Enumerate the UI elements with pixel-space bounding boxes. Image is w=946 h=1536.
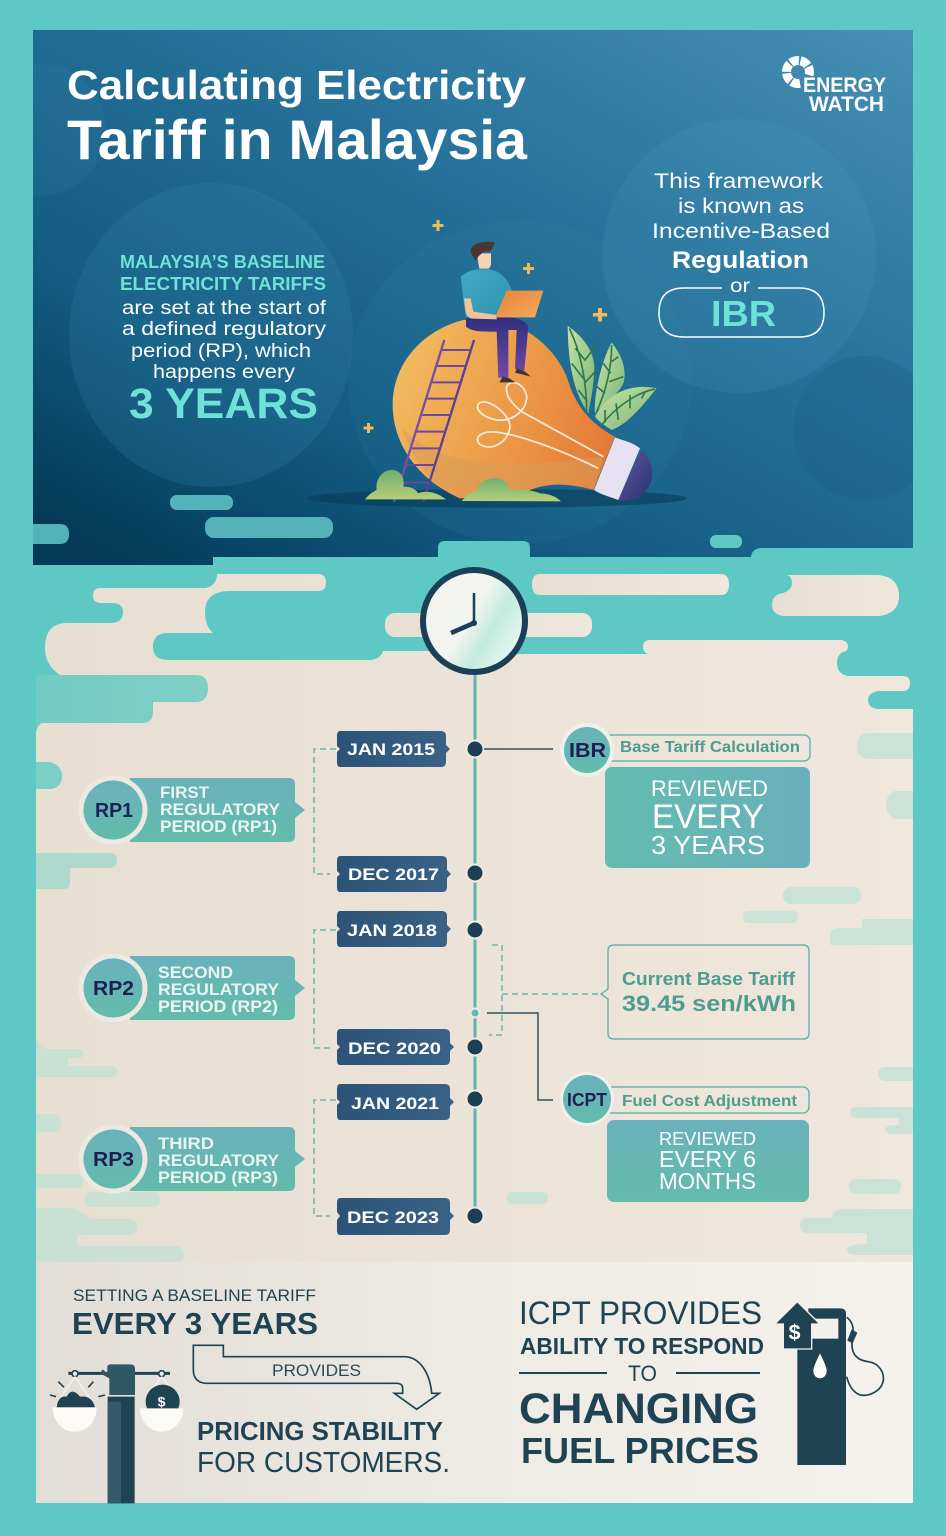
panel: ICPT fuel cost adjustment: REVIEWED — [659, 1129, 756, 1149]
text block: IBR framework: This framework — [654, 170, 824, 193]
panel: ICPT fuel cost adjustment: ICPT — [567, 1090, 607, 1110]
date label: Dec 2023: DEC 2023 — [347, 1208, 439, 1227]
text block: pricing stability: PRICING STABILITY — [197, 1416, 443, 1446]
panel: ICPT fuel cost adjustment: MONTHS — [659, 1168, 756, 1194]
badge: RP1 first regulatory period — [78, 776, 305, 844]
date label: Jan 2015 — [337, 731, 450, 767]
text block: every 3 years: EVERY 3 YEARS — [72, 1306, 318, 1341]
text block: baseline tariffs: period (RP), which — [131, 341, 311, 362]
badge: RP1 first regulatory period: REGULATORY — [160, 800, 281, 819]
badge: RP3 third regulatory period: REGULATORY — [158, 1151, 280, 1170]
connector: timeline to IBR — [484, 748, 553, 750]
badge: RP3 third regulatory period — [78, 1124, 305, 1194]
text block: IBR framework: Incentive-Based — [652, 220, 830, 243]
text block: every 3 years: SETTING A BASELINE TARIFF — [73, 1286, 316, 1305]
text block: pricing stability: FOR CUSTOMERS. — [197, 1447, 450, 1479]
date label: Dec 2017: DEC 2017 — [348, 865, 439, 884]
text block: baseline tariffs: happens every — [153, 362, 296, 383]
panel: IBR base tariff calculation: EVERY — [652, 798, 764, 836]
illustration: man on light bulb — [307, 242, 687, 508]
date label: Dec 2023 — [337, 1198, 454, 1235]
title — [67, 62, 528, 171]
text block: ICPT provides: TO — [628, 1361, 657, 1386]
text block: ICPT provides: CHANGING — [519, 1385, 758, 1433]
date label: Jan 2018 — [337, 911, 451, 947]
text block: pricing stability — [197, 1416, 450, 1479]
text block: IBR framework: or — [730, 276, 751, 297]
text block: baseline tariffs: MALAYSIA’S BASELINE — [120, 252, 325, 272]
panel: timeline paper with clouds — [36, 574, 913, 1262]
text block: every 3 years — [72, 1286, 318, 1341]
text block: baseline tariffs — [120, 252, 327, 428]
logo: Energy Watch — [785, 59, 886, 116]
panel: IBR base tariff calculation: REVIEWED — [651, 776, 768, 801]
text block: baseline tariffs: ELECTRICITY TARIFFS — [120, 274, 326, 294]
text block: IBR framework: IBR — [711, 293, 776, 334]
badge: RP1 first regulatory period: FIRST — [160, 783, 210, 802]
sparkles — [364, 220, 607, 433]
text block: ICPT provides: FUEL PRICES — [521, 1430, 759, 1471]
badge: RP2 second regulatory period: REGULATORY — [158, 980, 280, 999]
callout: current base tariff: Current Base Tariff — [622, 969, 796, 989]
icon: clock — [423, 570, 525, 672]
badge: RP2 second regulatory period: SECOND — [158, 963, 233, 982]
dashed brackets — [314, 749, 600, 1216]
date label: Dec 2020: DEC 2020 — [348, 1039, 441, 1058]
panel: IBR base tariff calculation: IBR — [569, 740, 607, 762]
date label: Jan 2018: JAN 2018 — [347, 921, 437, 940]
badge: RP3 third regulatory period: RP3 — [93, 1149, 134, 1171]
panel: header — [0, 30, 937, 565]
panel: ICPT fuel cost adjustment: EVERY 6 — [659, 1146, 756, 1172]
text block: ICPT provides — [519, 1295, 764, 1471]
badge: RP1 first regulatory period: PERIOD (RP1) — [160, 817, 277, 836]
icon: fuel pump — [775, 1302, 883, 1465]
text block: baseline tariffs: are set at the start of — [122, 298, 327, 319]
panel: IBR base tariff calculation: 3 YEARS — [651, 830, 765, 860]
panel: IBR base tariff calculation — [560, 723, 810, 868]
arrow: provides — [193, 1345, 439, 1409]
panel: ICPT fuel cost adjustment — [560, 1072, 809, 1202]
date label: Jan 2021: JAN 2021 — [351, 1094, 439, 1113]
panel: ICPT fuel cost adjustment: Fuel Cost Adjustment — [622, 1093, 798, 1110]
icon: fuel pump: $ — [789, 1320, 801, 1344]
text block: baseline tariffs: a defined regulatory — [122, 319, 327, 340]
logo: Energy Watch: ENERGY — [803, 74, 886, 97]
callout: current base tariff — [601, 945, 809, 1039]
text block: ICPT provides: ICPT PROVIDES — [519, 1295, 762, 1331]
title: Calculating Electricity — [67, 62, 526, 108]
date label: Jan 2021 — [337, 1084, 454, 1120]
callout: current base tariff: 39.45 sen/kWh — [622, 991, 796, 1016]
panel: IBR base tariff calculation: Base Tariff Calculation — [620, 739, 800, 756]
date label: Jan 2015: JAN 2015 — [347, 740, 435, 759]
badge: RP2 second regulatory period: RP2 — [93, 978, 134, 1000]
header cloud edge — [33, 495, 913, 566]
date label: Dec 2017 — [337, 856, 451, 892]
badge: RP3 third regulatory period: PERIOD (RP3) — [158, 1168, 278, 1187]
icon: balance scale in hand: $ — [158, 1393, 166, 1409]
text block: IBR framework — [652, 170, 830, 337]
badge: RP2 second regulatory period: PERIOD (RP2) — [158, 997, 278, 1016]
text block: IBR framework: is known as — [678, 195, 804, 218]
connector: timeline to ICPT — [487, 1013, 553, 1100]
logo: Energy Watch: WATCH — [809, 93, 884, 116]
decorative teal clouds — [36, 675, 913, 1262]
text block: IBR framework: Regulation — [672, 247, 809, 274]
badge: RP1 first regulatory period: RP1 — [95, 800, 133, 822]
icon: balance scale in hand — [50, 1364, 183, 1503]
text block: baseline tariffs: 3 YEARS — [129, 380, 318, 428]
date label: Dec 2020 — [337, 1029, 454, 1065]
title: Tariff in Malaysia — [67, 108, 528, 171]
timeline dots — [466, 740, 484, 1224]
badge: RP3 third regulatory period: THIRD — [158, 1134, 214, 1153]
badge: RP2 second regulatory period — [78, 954, 305, 1022]
text block: ICPT provides: ABILITY TO RESPOND — [520, 1333, 764, 1359]
arrow: provides: PROVIDES — [272, 1361, 361, 1380]
timeline line — [474, 675, 476, 1217]
panel: footer — [36, 1262, 913, 1503]
